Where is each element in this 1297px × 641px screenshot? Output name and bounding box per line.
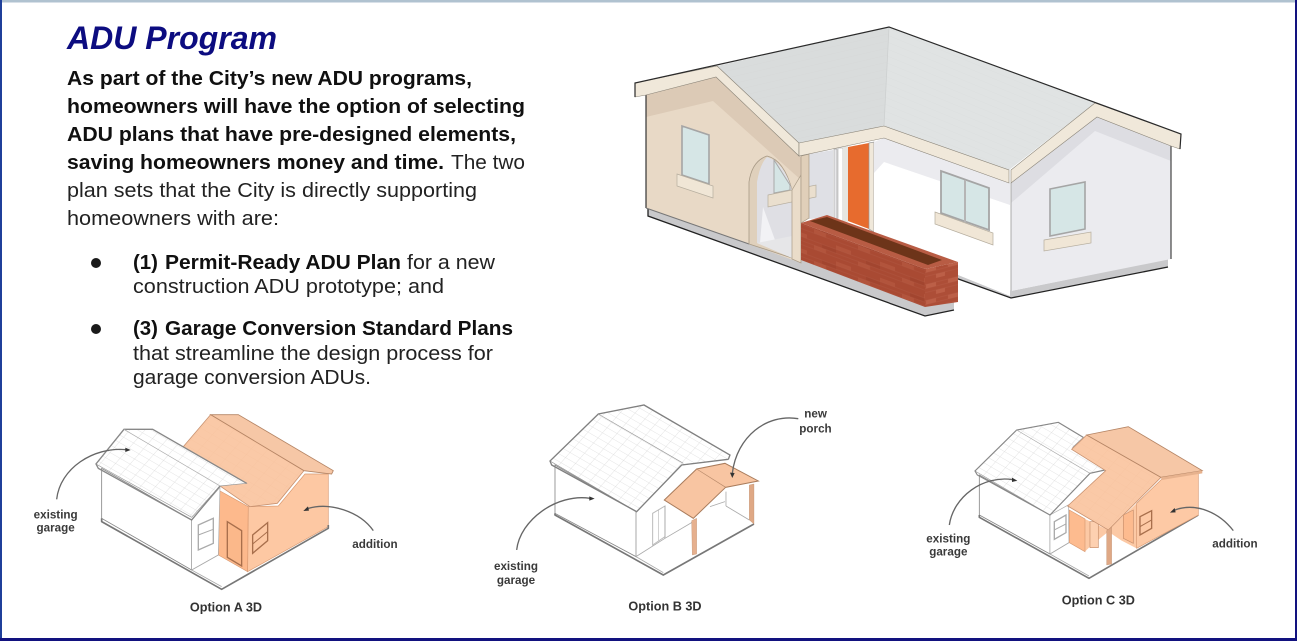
bullet list item 2 — [91, 317, 513, 389]
porch sill behind pillar — [768, 185, 816, 207]
porch arch — [749, 156, 792, 258]
bullet list item 1: construction ADU prototype; and — [133, 275, 444, 298]
bullet list item 1: for a new — [407, 251, 495, 274]
label: addition: addition — [1212, 537, 1258, 550]
caption: Option B 3D: Option B 3D — [628, 600, 702, 614]
intro text block: The two — [451, 151, 525, 174]
bullet list item 1 — [91, 251, 495, 298]
label: porch clipped: porch — [799, 422, 832, 435]
arrow to existing garage — [517, 496, 595, 550]
arrow to addition — [303, 506, 373, 531]
label: existing garage: garage — [37, 522, 75, 535]
bullet list item 2: Garage Conversion Standard Plans — [165, 317, 513, 340]
existing garage — [975, 422, 1198, 578]
existing garage — [96, 429, 328, 589]
pillar — [792, 154, 809, 263]
foundation — [648, 208, 1168, 316]
addition — [1068, 427, 1202, 565]
arrow to addition — [1170, 507, 1233, 531]
bullet list item 2: garage conversion ADUs. — [133, 366, 371, 389]
right wall — [1011, 117, 1171, 291]
existing garage — [550, 405, 754, 575]
arrow to existing garage — [949, 478, 1017, 525]
caption: Option C 3D: Option C 3D — [1062, 594, 1135, 608]
intro text block — [67, 67, 525, 230]
label: addition: addition — [352, 538, 398, 551]
title: ADU Program — [66, 20, 277, 56]
caption: Option A 3D: Option A 3D — [190, 600, 262, 614]
label: existing garage: existing — [926, 533, 970, 546]
intro text block: homeowners will have the option of selecting — [67, 95, 525, 118]
intro text block: As part of the City’s new ADU programs, — [67, 67, 472, 90]
bullet list item 1: Permit-Ready ADU Plan — [165, 251, 401, 274]
bullet list item 2: that streamline the design process for — [133, 342, 493, 365]
label: new: new — [804, 408, 828, 421]
brick planter — [801, 215, 958, 307]
roof — [635, 27, 1181, 183]
bullet list item 2: (3) — [133, 317, 158, 340]
label: existing garage: garage — [929, 545, 968, 558]
option C diagram — [926, 422, 1258, 608]
arrow to porch — [730, 418, 798, 478]
label: existing garage: existing — [494, 560, 538, 573]
door — [848, 143, 869, 229]
windows — [677, 126, 1091, 251]
door frame — [869, 142, 874, 232]
bullet list item 1: (1) — [133, 251, 158, 274]
main house illustration — [635, 27, 1181, 316]
new porch — [664, 463, 758, 555]
option A diagram — [34, 415, 398, 614]
intro text block: ADU plans that have pre-designed elements, — [67, 123, 516, 146]
intro text block: homeowners with are: — [67, 207, 279, 230]
arrow to existing garage — [57, 448, 131, 499]
label: existing garage: existing — [34, 508, 78, 521]
centre wall — [874, 138, 1010, 296]
left wall — [646, 77, 801, 263]
label: existing garage: garage — [497, 574, 536, 587]
recess back wall — [809, 146, 848, 222]
addition — [183, 415, 333, 572]
option B diagram — [494, 405, 832, 614]
intro text block: saving homeowners money and time. — [67, 151, 444, 174]
intro text block: plan sets that the City is directly supporting — [67, 179, 477, 202]
